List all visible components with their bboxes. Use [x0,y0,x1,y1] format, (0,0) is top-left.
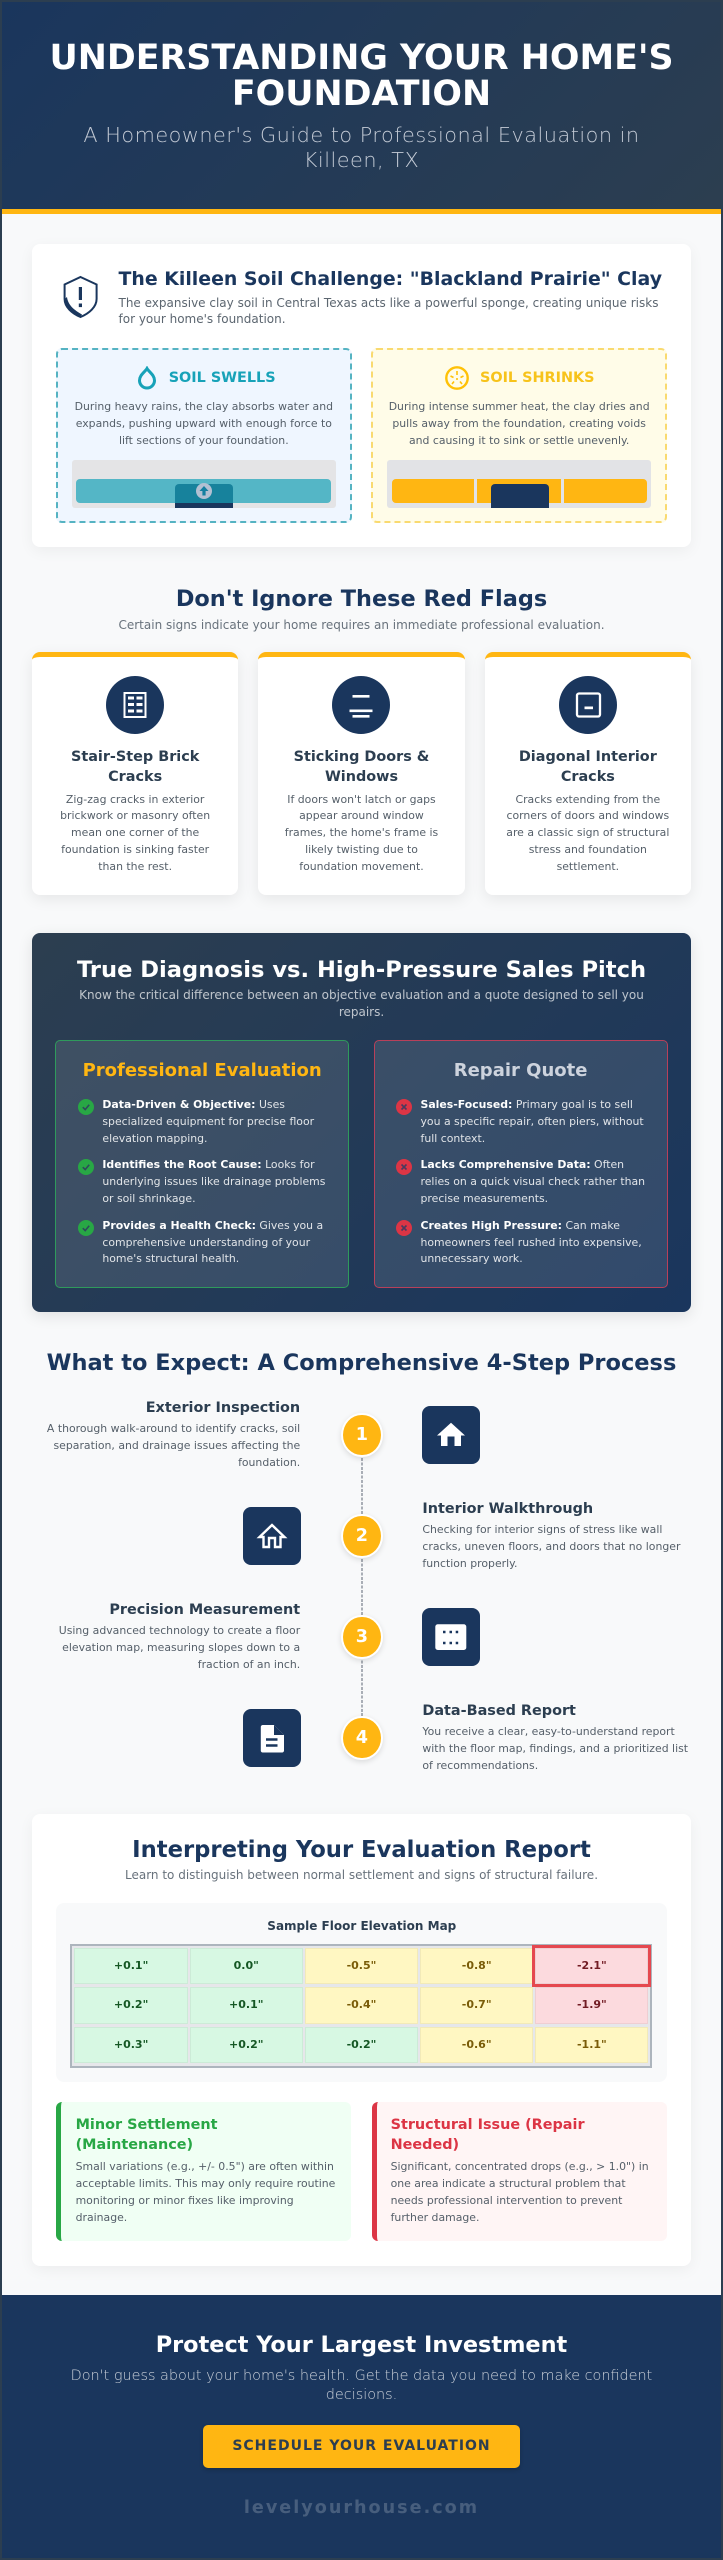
item text: Creates High Pressure: Can make [420,1219,620,1232]
elevation grid: -0.8" [462,1959,492,1972]
step text: Data-Based Report [422,1703,576,1719]
step number [341,1413,383,1457]
soil swells text: During heavy rains, the clay absorbs water and [75,400,333,413]
step text: foundation. [238,1456,300,1469]
step text [44,1398,300,1468]
card text: corners of doors and windows [506,809,669,822]
step number: 1 [356,1425,368,1445]
item text: specialized equipment for precise floor [102,1115,314,1128]
item text: full context. [420,1132,485,1145]
soil shrinks heading: SOIL SHRINKS [480,370,595,386]
comparison heading: True Diagnosis vs. High-Pressure Sales Pitch [77,957,646,983]
panel: repair quote [374,1040,668,1288]
card text: are a classic sign of structural [506,826,669,839]
card title [71,749,200,785]
callout title: Minor Settlement [76,2117,218,2133]
step text: separation, and drainage issues affecting the [54,1439,300,1452]
item text [102,1158,325,1205]
callout text: further damage. [391,2211,479,2224]
x item 3 [396,1218,660,1269]
step number: 2 [356,1526,368,1546]
heading: 4-step process: What to Expect: A Comprehensive 4-Step Process [47,1350,676,1376]
icon: up arrow [196,483,212,499]
card text: foundation is sinking faster [61,843,209,856]
icon: shield warning [64,276,98,318]
step text: Exterior Inspection [146,1400,300,1416]
button: schedule evaluation: SCHEDULE YOUR EVALUATION [232,2438,491,2454]
soil shrinks text [389,400,650,447]
callout title: (Maintenance) [76,2137,193,2153]
step text: Precision Measurement [109,1602,300,1618]
step text: A thorough walk-around to identify cracks, soil [47,1422,300,1435]
step text: cracks, uneven floors, and doors that no longer [422,1540,680,1553]
diagram: settling foundation [387,460,651,508]
step number [341,1514,383,1558]
card text [285,793,438,873]
card text: foundation movement. [299,860,424,873]
soil swells text [75,400,333,447]
repair quote heading: Repair Quote [454,1060,587,1081]
step number [341,1615,383,1659]
item text: you a specific repair, often piers, without [420,1115,644,1128]
icon: check [78,1099,94,1115]
step text: of recommendations. [422,1759,538,1772]
card text [60,793,210,873]
card title: Cracks [561,769,615,785]
diagram: upward pressure [72,460,336,508]
card text: appear around window [299,809,424,822]
step text: function properly. [422,1557,518,1570]
elevation grid: -1.1" [577,2038,607,2051]
comparison subheading [79,988,644,1019]
check item 3 [78,1219,323,1265]
step text: Using advanced technology to create a floor [59,1624,300,1637]
item text [102,1219,323,1265]
card text: Zig-zag cracks in exterior [66,793,204,806]
icon: check [78,1220,94,1236]
heading: red flags: Don't Ignore These Red Flags [176,586,547,612]
card title [519,749,657,785]
soil challenge description: The expansive clay soil in Central Texas acts like a powerful sponge, creating unique risks [118,296,658,310]
step text: Checking for interior signs of stress like wall [422,1523,662,1536]
item text [420,1098,644,1145]
soil swells text: lift sections of your foundation. [119,434,289,447]
item text: Provides a Health Check: Gives you a [102,1219,323,1232]
step text: elevation map, measuring slopes down to a [62,1641,300,1654]
map title: Sample Floor Elevation Map [267,1919,456,1933]
soil shrinks text: pulls away from the foundation, creating voids [392,417,646,430]
elevation grid: +0.1" [229,1998,263,2011]
panel: interpreting the report [32,1814,691,2266]
x item 1 [396,1098,644,1145]
card title: Cracks [108,769,162,785]
item text: Sales-Focused: Primary goal is to sell [420,1098,633,1111]
item text: Data-Driven & Objective: Uses [102,1098,285,1111]
icon: x [396,1220,412,1236]
card title [294,749,429,785]
item text: precise measurements. [420,1192,548,1205]
elevation grid: +0.2" [229,2038,263,2051]
item text: elevation mapping. [102,1132,208,1145]
panel: floor elevation map [56,1903,667,2082]
callout text [391,2159,649,2226]
soil swells text: expands, pushing upward with enough force to [76,417,332,430]
elevation grid: +0.3" [114,2038,148,2051]
report subheading: Learn to distinguish between normal settlement and signs of structural failure. [125,1868,598,1882]
professional evaluation heading: Professional Evaluation [83,1060,322,1081]
item text: or soil shrinkage. [102,1192,196,1205]
item text [420,1157,645,1208]
callout title [76,2116,218,2155]
callout text: one area indicate a structural problem that [391,2177,626,2190]
soil shrinks text: During intense summer heat, the clay dries and [389,400,650,413]
elevation grid: -0.5" [347,1959,376,1972]
panel: soil shrinks [371,348,667,523]
item text: homeowners feel rushed into expensive, [420,1236,642,1249]
icon: solid house [422,1406,480,1464]
item text: unnecessary work. [420,1252,523,1265]
callout text: Significant, concentrated drops (e.g., > 1.0") in [391,2160,649,2173]
footer heading: Protect Your Largest Investment [156,2332,567,2358]
step text [422,1499,692,1569]
step text [44,1600,300,1670]
icon: x [396,1159,412,1175]
check item 1 [78,1098,314,1145]
header banner [0,0,723,214]
elevation grid: -0.7" [462,1998,492,2011]
button: schedule evaluation [203,2425,520,2468]
subtitle [83,123,640,172]
elevation grid: -1.9" [577,1998,607,2011]
card: stair-step brick cracks [31,652,239,900]
elevation grid: +0.2" [114,1998,148,2011]
step 2: interior walkthrough [44,1499,694,1569]
subtitle: Killeen, TX [304,148,419,172]
callout title: Needed) [391,2137,459,2153]
panel: diagnosis vs sales pitch [32,933,691,1312]
item text: comprehensive understanding of your [102,1236,310,1249]
step text: You receive a clear, easy-to-understand report [422,1725,675,1738]
card text: mean one corner of the [71,826,199,839]
icon: brick wall [106,676,164,734]
card title: Windows [325,769,398,785]
soil swells heading: SOIL SWELLS [169,370,276,386]
elevation grid: -0.4" [347,1998,376,2011]
step number: 4 [356,1728,368,1748]
callout: structural issue [372,2102,667,2241]
footer call to action [0,2295,723,2560]
title: FOUNDATION [232,74,491,114]
item text [420,1218,642,1268]
callout text: acceptable limits. This may only require routine [76,2177,335,2190]
step text [422,1701,692,1771]
comparison subheading: Know the critical difference between an objective evaluation and a quote designed to sell you [79,988,644,1002]
website: levelyourhouse.com [244,2498,479,2518]
card text: likely twisting due to [305,843,418,856]
footer text: decisions. [326,2387,397,2403]
item text: relies on a quick visual check rather than [420,1175,645,1188]
card: sticking doors and windows [257,652,466,900]
item text: Lacks Comprehensive Data: Often [420,1158,624,1171]
callout: minor settlement [56,2102,351,2241]
card text [506,793,669,873]
title [49,38,674,114]
card title: Sticking Doors & [294,749,429,765]
card: diagonal interior cracks [484,652,692,900]
step number: 3 [356,1627,368,1647]
footer text: Don't guess about your home's health. Get the data you need to make confident [71,2368,652,2384]
step 4: data-based report [44,1701,694,1771]
card text: settlement. [557,860,619,873]
soil challenge description: for your home's foundation. [118,312,286,326]
elevation grid: -0.2" [347,2038,376,2051]
icon: x [396,1099,412,1115]
check item 2 [78,1158,325,1205]
icon: door lines [332,676,390,734]
soil shrinks text: and causing it to sink or settle unevenly. [409,434,629,447]
card title: Stair-Step Brick [71,749,199,765]
step text: with the floor map, findings, and a prioritized list [422,1742,688,1755]
elevation grid: 0.0" [234,1959,259,1972]
callout title: Structural Issue (Repair [391,2117,585,2133]
item text: underlying issues like drainage problems [102,1175,325,1188]
soil challenge heading: The Killeen Soil Challenge: "Blackland Prairie" Clay [118,268,662,290]
card text: If doors won't latch or gaps [287,793,436,806]
callout text: Small variations (e.g., +/- 0.5") are often within [76,2160,334,2173]
card title: Diagonal Interior [519,749,657,765]
icon: outline house [243,1507,301,1565]
elevation grid: -0.6" [462,2038,492,2051]
comparison subheading: repairs. [339,1005,384,1019]
subtitle: A Homeowner's Guide to Professional Evaluation in [83,123,640,147]
callout text: drainage. [76,2211,127,2224]
step text: fraction of an inch. [198,1658,300,1671]
callout title [391,2116,585,2155]
step number [341,1716,383,1760]
icon: cracked sun [445,366,469,390]
item text: Identifies the Root Cause: Looks for [102,1158,315,1171]
callout text: monitoring or minor fixes like improving [76,2194,294,2207]
callout text: needs professional intervention to prevent [391,2194,622,2207]
card text: stress and foundation [529,843,647,856]
step 3: precision measurement [44,1600,694,1670]
panel: soil challenge [32,244,691,547]
panel: professional evaluation [55,1040,349,1288]
card text: than the rest. [98,860,172,873]
icon: interior wall [559,676,617,734]
elevation grid [70,1944,652,2068]
red flags subheading: Certain signs indicate your home requires an immediate professional evaluation. [118,618,605,632]
footer text [0,2367,723,2406]
card text: frames, the home's frame is [285,826,438,839]
soil challenge description [118,296,658,326]
icon: water drop [138,366,156,390]
item text [102,1098,314,1145]
panel: soil swells [56,348,352,523]
card text: Cracks extending from the [515,793,660,806]
step 1: exterior inspection [44,1398,694,1468]
title: UNDERSTANDING YOUR HOME'S [49,38,674,78]
icon: check [78,1159,94,1175]
x item 2 [396,1158,645,1205]
elevation grid: +0.1" [114,1959,148,1972]
elevation grid: -2.1" [577,1959,607,1972]
icon: measurement device [422,1608,480,1666]
icon: document [243,1709,301,1767]
card text: brickwork or masonry often [60,809,210,822]
step text: Interior Walkthrough [422,1501,593,1517]
report heading: Interpreting Your Evaluation Report [132,1837,591,1863]
item text: home's structural health. [102,1252,239,1265]
callout text [76,2159,335,2226]
